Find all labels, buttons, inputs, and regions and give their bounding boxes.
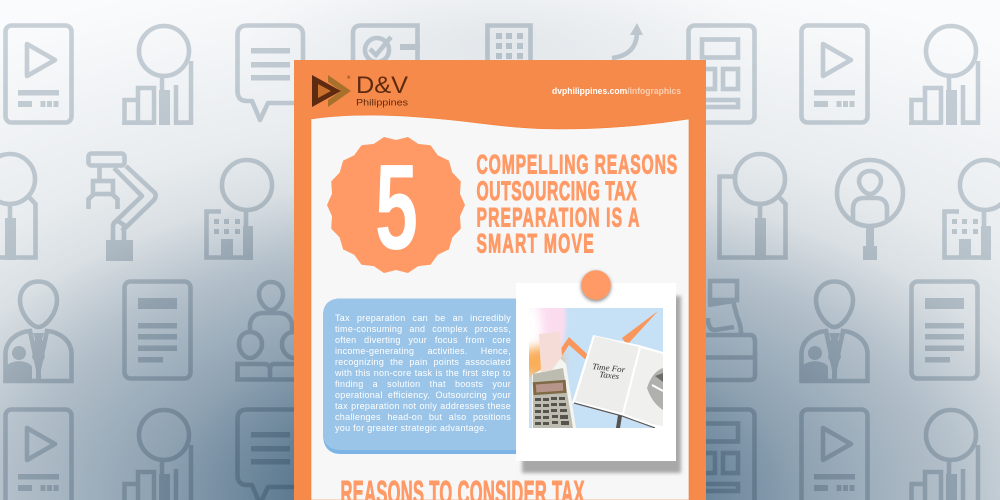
orange arrow: [561, 337, 587, 360]
intro paragraph: you for greater strategic advantage.: [335, 422, 487, 432]
icon: logo arrows: [312, 75, 351, 107]
pin: [581, 270, 611, 302]
logo wordmark: Philippines: [356, 98, 408, 108]
intro paragraph: Tax preparation can be an incredibly: [335, 312, 511, 322]
handwriting: Time For: [592, 361, 626, 375]
logo: [312, 72, 409, 108]
intro paragraph: often diverting your focus from core: [335, 334, 511, 344]
title: COMPELLING REASONS: [476, 149, 677, 180]
row 2 icons: [0, 154, 1000, 261]
calculator: [532, 358, 576, 428]
intro paragraph: time-consuming and complex process,: [335, 324, 511, 334]
panel: infographic sheet: [294, 60, 706, 500]
handwriting: Taxes: [599, 369, 620, 381]
website url: dvphilippines.com/infographics: [552, 86, 681, 96]
photo card: [516, 270, 681, 473]
badge: number 5: 5: [375, 139, 418, 275]
glow: [529, 308, 546, 354]
row 3 icons: [6, 281, 978, 381]
handwriting: [592, 364, 626, 379]
logo wordmark: ®: [347, 74, 351, 80]
calculator receipt: [539, 332, 562, 372]
intro paragraph: operational efficiency. Outsourcing your: [335, 390, 511, 400]
card shadow: [522, 296, 681, 473]
white content area with wavy top: [311, 115, 689, 500]
logo wordmark: D&V: [356, 72, 409, 99]
title: SMART MOVE: [476, 228, 594, 259]
row 1 icons: [6, 23, 980, 125]
row 4 icons: [6, 410, 980, 500]
intro paragraph: with this non-core task is the first step to: [335, 368, 511, 378]
title: OUTSOURCING TAX: [476, 176, 637, 206]
intro paragraph: challenges head-on but also positions: [335, 412, 511, 422]
orange sheet: [294, 60, 706, 500]
card: [516, 283, 676, 461]
intro paragraph: income-generating activities. Hence,: [335, 346, 511, 356]
title: [476, 149, 677, 259]
title: PREPARATION IS A: [476, 202, 640, 233]
panel: blue intro box: [323, 298, 520, 454]
intro paragraph: finding a solution that boosts your: [335, 378, 511, 388]
badge: number 5: [327, 137, 465, 275]
notebook: [572, 335, 663, 428]
intro paragraph: [335, 312, 511, 433]
intro paragraph: tax preparation not only addresses these: [335, 400, 511, 410]
photo: calculator and notebook: [529, 308, 663, 428]
hand: [647, 368, 663, 410]
intro paragraph: recognizing the pain points associated: [335, 356, 511, 366]
logo wordmark: [347, 72, 409, 108]
calculator keys: [535, 397, 569, 425]
